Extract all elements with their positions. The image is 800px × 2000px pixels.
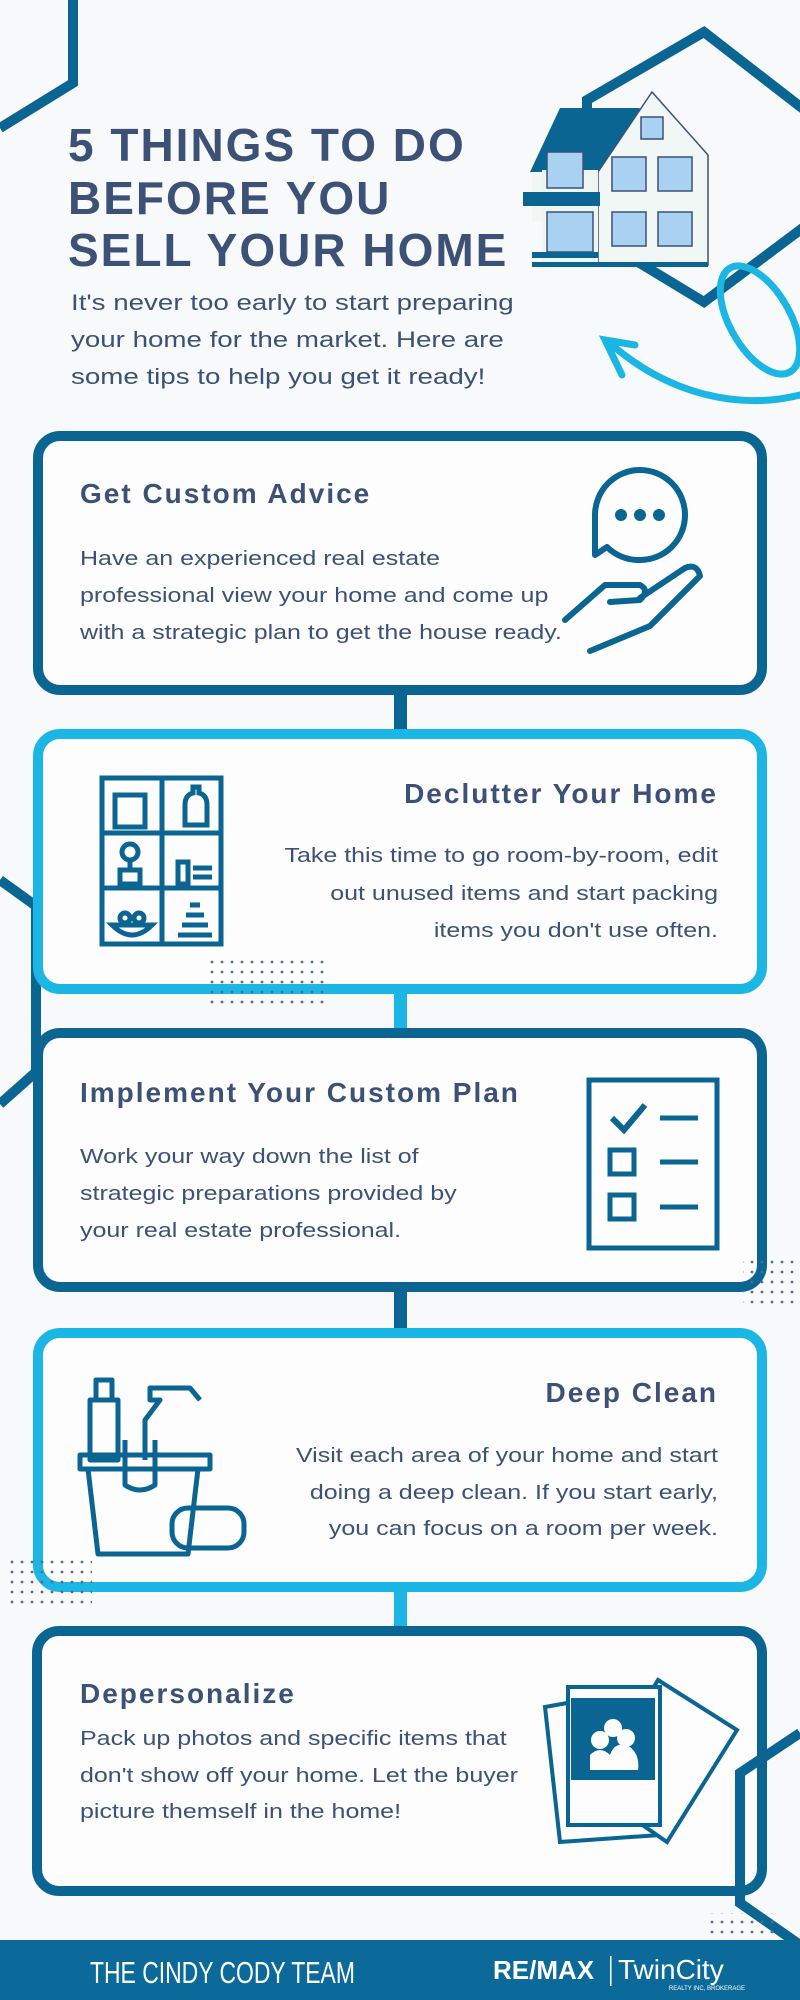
- icon: shelves: [102, 778, 221, 944]
- subtitle: [71, 291, 514, 389]
- body: get custom advice: [79, 546, 562, 643]
- panel: get custom advice: [38, 436, 762, 690]
- footer: logo: REALTY INC, BROKERAGE: [669, 1986, 745, 1992]
- body: get custom advice: Have an experienced real estate: [80, 546, 440, 569]
- footer: logo: TwinCity: [618, 1954, 724, 1985]
- connector line: [394, 690, 407, 1635]
- body: deep clean: you can focus on a room per week.: [329, 1516, 718, 1539]
- body: declutter: Take this time to go room-by-room, edit: [284, 843, 719, 866]
- decoration: dots bottom right: [708, 1913, 780, 1940]
- decoration: dots under panel 2: [204, 957, 329, 1007]
- body: implement: [80, 1144, 457, 1241]
- subtitle: It's never too early to start preparing: [71, 291, 514, 315]
- body: declutter: items you don't use often.: [434, 918, 718, 941]
- panel: depersonalize: [37, 1631, 762, 1891]
- body: depersonalize: picture themself in the home!: [80, 1799, 401, 1822]
- footer: logo: RE/MAX: [493, 1955, 595, 1985]
- body: implement: strategic preparations provided by: [80, 1181, 457, 1204]
- icon: photos: [545, 1680, 737, 1842]
- title: 5 THINGS TO DO: [68, 119, 466, 171]
- footer: logo: [493, 1954, 745, 1992]
- decoration: mid-left hexagon: [0, 880, 36, 1104]
- heading: get custom advice: Get Custom Advice: [80, 478, 371, 509]
- body: deep clean: [296, 1443, 719, 1539]
- title: [68, 119, 508, 276]
- body: depersonalize: [80, 1726, 518, 1822]
- decoration: bottom-right hexagon: [740, 1733, 800, 1945]
- icon: house: [523, 92, 708, 267]
- panel: implement plan: [38, 1033, 762, 1287]
- icon: speech hand: [565, 470, 700, 651]
- subtitle: some tips to help you get it ready!: [71, 365, 485, 389]
- body: deep clean: Visit each area of your home and start: [296, 1443, 719, 1466]
- footer: [0, 1940, 800, 2000]
- body: implement: your real estate professional.: [80, 1218, 401, 1241]
- heading: declutter: Declutter Your Home: [404, 778, 718, 809]
- footer: team name: THE CINDY CODY TEAM: [90, 1955, 355, 1990]
- body: declutter: out unused items and start packing: [330, 881, 718, 904]
- decoration: light blue loop arrow: [605, 253, 800, 401]
- body: get custom advice: with a strategic plan to get the house ready.: [79, 620, 562, 643]
- body: implement: Work your way down the list of: [80, 1144, 419, 1167]
- body: get custom advice: professional view your home and come up: [80, 583, 548, 606]
- subtitle: your home for the market. Here are: [71, 328, 504, 352]
- icon: cleaning bucket: [80, 1380, 244, 1554]
- body: depersonalize: Pack up photos and specific items that: [80, 1726, 507, 1749]
- decoration: top-left hexagon line: [0, 0, 73, 128]
- heading: deep clean: Deep Clean: [546, 1377, 718, 1408]
- decoration: top-right hexagon: [587, 32, 800, 302]
- heading: depersonalize: Depersonalize: [80, 1678, 296, 1709]
- heading: implement: Implement Your Custom Plan: [80, 1077, 520, 1108]
- decoration: dots left of panel 4: [5, 1559, 92, 1609]
- body: deep clean: doing a deep clean. If you start early,: [310, 1480, 718, 1503]
- panel: deep clean: [38, 1333, 762, 1587]
- title: BEFORE YOU: [68, 172, 391, 224]
- body: declutter: [284, 843, 719, 941]
- icon: checklist: [589, 1080, 717, 1248]
- body: depersonalize: don't show off your home. Let the buyer: [80, 1763, 518, 1786]
- title: SELL YOUR HOME: [68, 224, 508, 276]
- panel: declutter: [38, 734, 762, 989]
- decoration: dots right of panel 3: [743, 1257, 800, 1307]
